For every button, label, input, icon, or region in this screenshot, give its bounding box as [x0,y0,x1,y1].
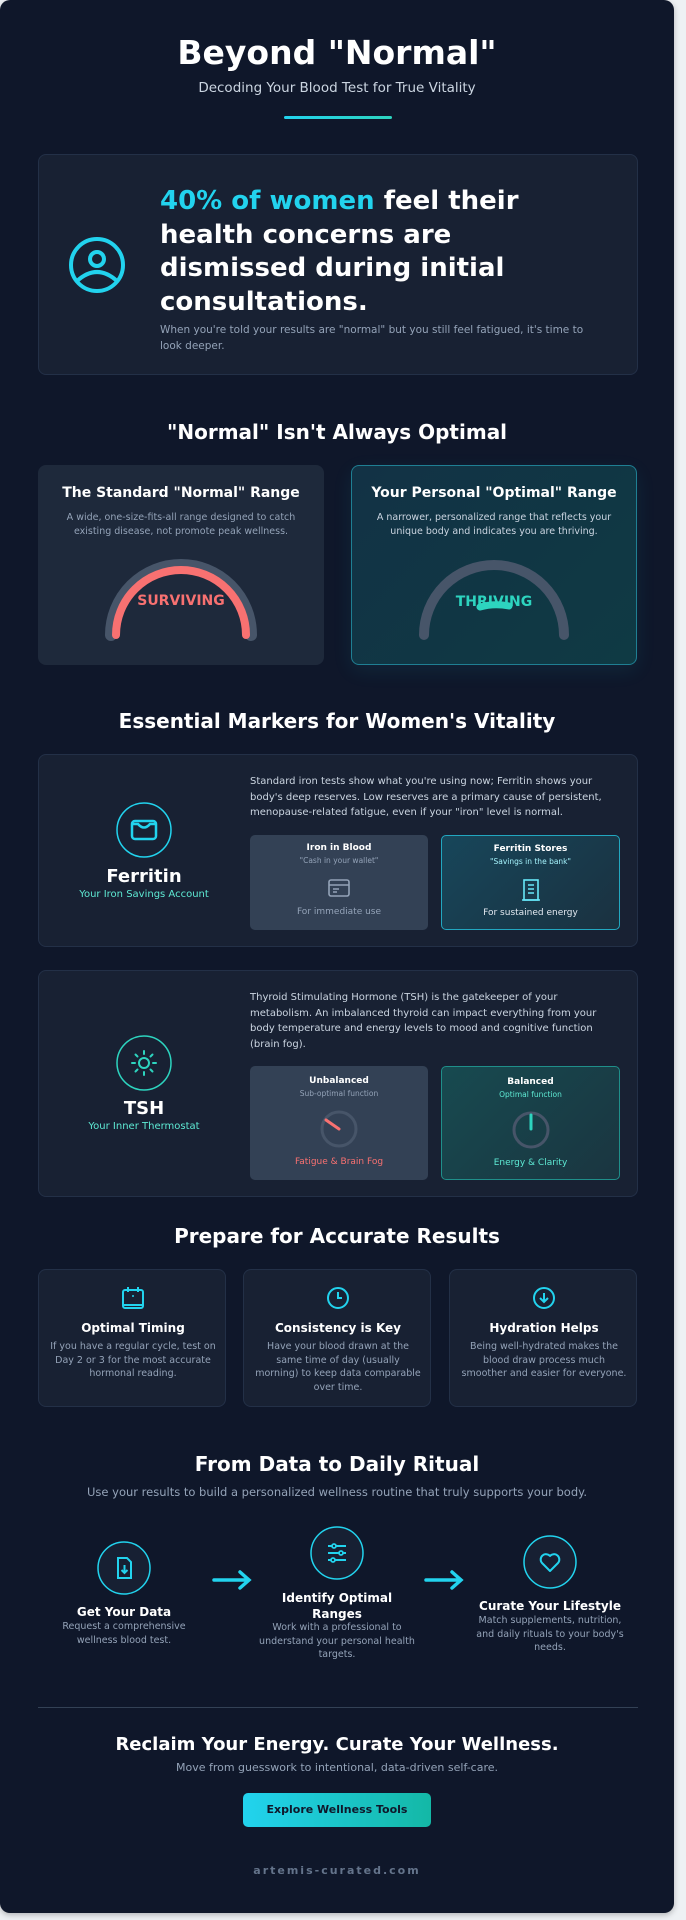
heading: essential markers: Essential Markers for Women's Vitality [119,709,555,733]
card description [377,512,612,536]
panel: optimal timing: Optimal Timing [81,1321,185,1335]
headline statistic: consultations. [160,286,368,316]
icon: bank document [522,879,540,901]
sub-card: ferritin stores: For sustained energy [483,908,578,918]
description: metabolism. An imbalanced thyroid can impact everything from your [250,1008,596,1019]
panel: consistency: morning) to keep data comparable [255,1368,421,1379]
card title: The Standard "Normal" Range [62,485,300,501]
supporting text [160,324,583,352]
sub-card: iron in blood: Iron in Blood [307,843,371,853]
icon: wallet [116,802,172,858]
gauge: surviving: SURVIVING [137,593,225,609]
gauge: thriving: THRIVING [456,594,532,610]
heading: data to ritual: From Data to Daily Ritual [195,1452,479,1476]
arrow 2 [424,1570,464,1590]
panel: statistic callout [38,154,638,375]
step: curate lifestyle: and daily rituals to your body's [476,1628,624,1640]
step: identify ranges: Ranges [312,1607,362,1621]
step: identify ranges: Identify Optimal [282,1591,392,1605]
panel: hydration: blood draw process much [483,1354,605,1366]
step: curate lifestyle: needs. [534,1642,566,1653]
footer url: artemis-curated.com [253,1864,421,1877]
supporting text: When you're told your results are "normal" but you still feel fatigued, it's time to [160,324,583,336]
panel: hydration [449,1269,637,1407]
description [250,776,602,818]
icon: file download [97,1541,151,1595]
step: identify ranges: Work with a professional to [272,1622,402,1633]
panel: standard range [38,465,324,665]
marker name: TSH [124,1098,164,1119]
headline statistic: 40% of women feel their [160,186,519,216]
description: body's deep reserves. Low reserves are a primary cause of persistent, [250,792,602,803]
icon: heart [523,1535,577,1589]
panel: consistency: same time of day (usually [276,1354,400,1366]
icon: card [328,879,350,897]
panel: optimal timing: hormonal reading. [89,1368,177,1379]
panel: ferritin [38,754,638,947]
headline statistic [160,186,519,316]
step: identify ranges: understand your personal health [259,1636,415,1646]
panel: TSH [38,970,638,1197]
button: Explore Wellness Tools [267,1803,407,1816]
sub-card: balanced: Optimal function [499,1090,562,1099]
card description: existing disease, not promote peak wellness. [74,526,288,536]
description: Thyroid Stimulating Hormone (TSH) is the gatekeeper of your [250,992,557,1003]
closing subtext: Move from guesswork to intentional, data-driven self-care. [176,1761,498,1774]
sub-card: unbalanced: Unbalanced [309,1076,369,1086]
icon: download circle [533,1287,555,1309]
gauge: surviving [105,559,257,641]
sub-card: balanced: Energy & Clarity [494,1158,567,1168]
panel: consistency: Consistency is Key [275,1321,401,1335]
step: get your data: Request a comprehensive [62,1621,186,1632]
subtitle: Decoding Your Blood Test for True Vitality [198,80,476,96]
step: get your data: Get Your Data [77,1605,171,1619]
card title: Your Personal "Optimal" Range [371,485,617,501]
panel: optimal range [351,465,637,665]
description: (brain fog). [250,1039,306,1050]
title underline [284,116,392,119]
step: curate lifestyle [476,1535,624,1653]
icon: calendar [122,1287,144,1309]
sub-card: balanced: Balanced [507,1077,554,1087]
sub-card: iron in blood [250,835,428,930]
icon: off dial [320,1110,358,1148]
panel: optimal timing [38,1269,226,1407]
card description: A narrower, personalized range that reflects your [377,512,611,523]
panel: consistency: Have your blood drawn at the [267,1341,409,1352]
title: Beyond "Normal" [177,33,497,72]
sub-card: unbalanced: Sub-optimal function [300,1089,378,1098]
heading: normal isn't optimal: "Normal" Isn't Always Optimal [167,420,507,444]
button [243,1793,431,1827]
panel: hydration: Being well-hydrated makes the [470,1341,618,1352]
step: get your data: wellness blood test. [77,1634,171,1646]
arrow 1 [212,1570,252,1590]
icon: sun [116,1035,172,1091]
marker tagline: Your Iron Savings Account [79,889,209,900]
card description: A wide, one-size-fits-all range designed to catch [67,512,295,523]
sub-card: ferritin stores: Ferritin Stores [494,844,567,854]
icon: sliders [310,1526,364,1580]
supporting text: look deeper. [160,340,225,352]
marker name: Ferritin [106,866,182,887]
subheading: Use your results to build a personalized wellness routine that truly supports your body. [87,1485,587,1499]
icon: clock [327,1287,349,1309]
gauge: thriving [419,560,569,640]
sub-card: unbalanced [250,1066,428,1180]
headline statistic: dismissed during initial [160,253,504,283]
card description: unique body and indicates you are thriving. [390,526,598,536]
sub-card: unbalanced: Fatigue & Brain Fog [295,1157,383,1167]
description [250,992,596,1050]
sub-card: balanced [441,1066,620,1180]
step: identify ranges [259,1526,415,1660]
step: identify ranges: targets. [319,1649,355,1660]
sub-card: iron in blood: "Cash in your wallet" [300,856,378,865]
panel: hydration: Hydration Helps [489,1321,599,1335]
card description [66,512,295,536]
description: body temperature and energy levels to mood and cognitive function [250,1023,593,1034]
panel: optimal timing: Day 2 or 3 for the most accurate [55,1354,211,1366]
sub-card: iron in blood: For immediate use [297,907,381,917]
panel: optimal timing: If you have a regular cycle, test on [50,1341,216,1352]
icon: person in circle [69,237,125,293]
step: curate lifestyle: Match supplements, nutrition, [479,1615,621,1626]
description: Standard iron tests show what you're using now; Ferritin shows your [250,776,592,787]
closing heading: Reclaim Your Energy. Curate Your Wellness. [115,1734,559,1755]
heading: prepare: Prepare for Accurate Results [174,1224,500,1248]
panel: hydration: smoother and easier for everyone. [462,1368,626,1379]
sub-card: ferritin stores [441,835,620,930]
marker tagline: Your Inner Thermostat [88,1121,200,1132]
step: curate lifestyle: Curate Your Lifestyle [479,1599,621,1613]
sub-card: ferritin stores: "Savings in the bank" [490,857,571,866]
icon: balanced dial [512,1112,550,1148]
description: menopause-related fatigue, even if your "iron" level is normal. [250,807,563,818]
step: get your data [62,1541,186,1646]
panel: consistency: over time. [314,1382,362,1392]
headline statistic: health concerns are [160,220,451,250]
panel: consistency [243,1269,431,1407]
